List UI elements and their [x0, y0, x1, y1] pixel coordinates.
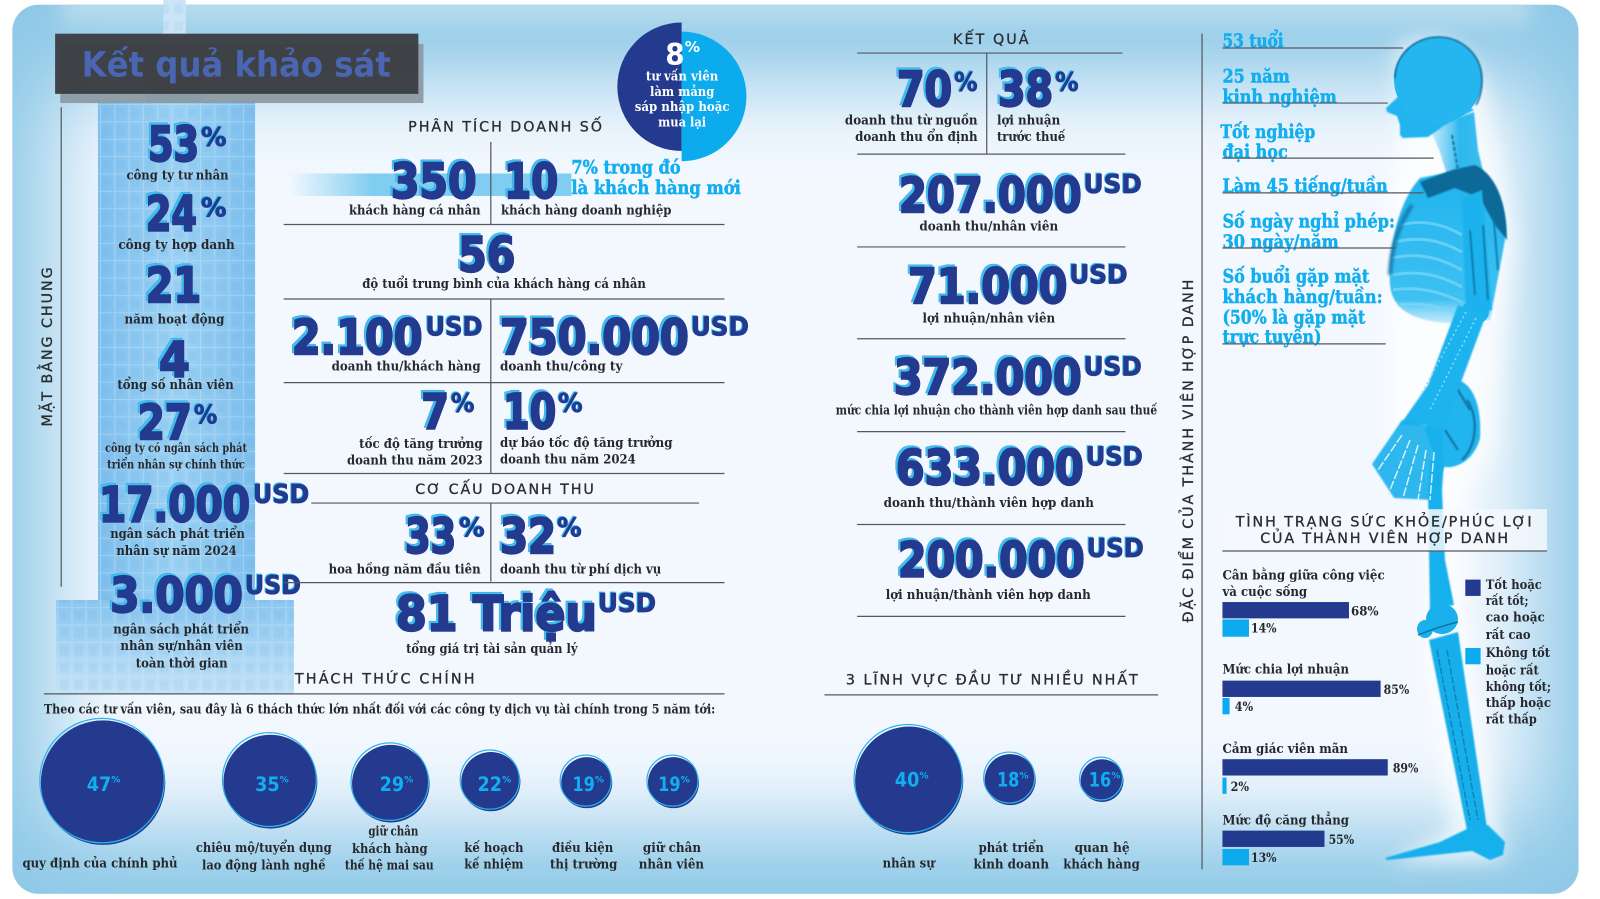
bubble: 19% market conditions: % — [595, 775, 604, 786]
heading: sales analysis: PHÂN TÍCH DOANH SỐ — [408, 117, 602, 136]
stat: 3,000 USD HR budget per employee: toàn thời gian — [136, 656, 228, 671]
panel: revenue structure — [284, 479, 724, 657]
bubble: 19% employee retention: giữ chân — [643, 841, 701, 856]
bubble: 40% human resources: 40 — [895, 769, 919, 792]
callout: client meetings per week: (50% là gặp mặt — [1222, 307, 1366, 328]
stat: 81 million USD AUM — [396, 587, 656, 657]
stat: 350 individual clients — [349, 154, 481, 218]
callout: 25 years experience: 25 năm — [1222, 67, 1290, 88]
bar group: stress level — [1222, 812, 1354, 866]
dividers — [857, 53, 1126, 616]
bubble: 47% government regulation — [22, 718, 178, 871]
stat: 81 million USD AUM: 81 Triệu — [396, 587, 597, 643]
callout: 8% M&A pie: sáp nhập hoặc — [635, 100, 730, 115]
callout: 25 years experience — [1222, 67, 1388, 108]
stat: 21 years of operation: năm hoạt động — [124, 312, 224, 327]
panel: results — [836, 29, 1158, 616]
stat: 24% partnerships: công ty hợp danh — [118, 238, 235, 253]
callout: 8% M&A pie: mua lại — [658, 116, 706, 131]
stat: 2,100 USD revenue per client: 2.100 — [292, 310, 422, 366]
stat: 17,000 USD HR budget 2024: USD — [253, 480, 309, 510]
bubble: 19% market conditions: điều kiện — [552, 840, 614, 856]
stat: 7% growth 2023: 7 — [421, 385, 449, 441]
stat: 750,000 USD revenue per company: USD — [691, 313, 749, 343]
stat: 3,000 USD HR budget per employee — [110, 568, 301, 671]
bubble: 47% government regulation: 47 — [87, 773, 111, 796]
stat: 71,000 USD profit per employee: 71.000 — [908, 259, 1067, 315]
stat: 33% first-year commission: % — [459, 514, 485, 544]
bubble: 40% human resources — [854, 724, 963, 871]
bar group: stress level: 13% — [1251, 851, 1277, 866]
stat: 27% formal HR budget: % — [194, 400, 217, 430]
stat: 4 employees: 4 — [159, 333, 190, 389]
stat: 38% pre-tax profit — [997, 62, 1079, 145]
stat: 750,000 USD revenue per company: doanh thu/công ty — [500, 359, 624, 374]
stat: 33% first-year commission: hoa hồng năm đầu tiên — [329, 561, 481, 577]
bar group: profit share: 85% — [1384, 683, 1410, 698]
stat: 10% projected growth 2024: doanh thu năm 2024 — [500, 452, 636, 467]
bar group: work-life balance: Cân bằng giữa công việc — [1222, 568, 1385, 584]
bubble: 29% next generation clients: 29 — [380, 773, 404, 796]
stat: 7% growth 2023: doanh thu năm 2023 — [347, 453, 483, 468]
stat: 71,000 USD profit per employee: lợi nhuận/nhân viên — [922, 311, 1055, 326]
bar group: profit share: 4% — [1235, 700, 1253, 715]
bubble: 16% client relations: % — [1111, 771, 1120, 782]
stat: 27% formal HR budget: công ty có ngân sách phát — [105, 441, 247, 455]
callout: 30 days leave per year — [1222, 211, 1396, 253]
stat: 33% first-year commission: 33 — [405, 509, 456, 565]
bubble: 35% skilled labour recruiting: 35 — [255, 773, 280, 796]
heading: top 3 investment areas: 3 LĨNH VỰC ĐẦU TƯ NHIỀU NHẤT — [846, 670, 1138, 689]
bubble: 35% skilled labour recruiting: chiêu mộ/tuyển dụng — [196, 840, 332, 856]
legend: poor or low: thấp hoặc — [1486, 695, 1551, 711]
bar group: work-life balance — [1222, 568, 1385, 637]
bubble: 40% human resources: nhân sự — [883, 856, 936, 871]
panel: partner characteristics callouts — [1220, 28, 1434, 348]
stat: 17,000 USD HR budget 2024 — [99, 477, 309, 559]
bubble: 29% next generation clients: khách hàng — [352, 842, 428, 857]
callout: 8% M&A pie — [617, 22, 746, 161]
bar group: work-life balance: 14% — [1251, 622, 1277, 637]
callout: 8% M&A pie: 8 — [665, 37, 685, 71]
bubble: 19% market conditions — [550, 755, 617, 872]
stat: 3,000 USD HR budget per employee: USD — [245, 571, 301, 601]
callout: university graduate: Tốt nghiệp — [1220, 121, 1315, 143]
stat: 10% projected growth 2024: dự báo tốc độ tăng trưởng — [500, 435, 672, 451]
callout: client meetings per week: khách hàng/tuần: — [1222, 286, 1383, 308]
bar group: profit share: Mức chia lợi nhuận — [1222, 662, 1349, 677]
callout: client meetings per week — [1222, 264, 1386, 348]
stat: 207,000 USD revenue per employee: USD — [1084, 170, 1142, 200]
stat: 56 average client age: độ tuổi trung bình của khách hàng cá nhân — [362, 276, 646, 292]
stat: 633,000 USD revenue per partner: 633.000 — [896, 441, 1084, 497]
callout: 53 years old: 53 tuổi — [1222, 28, 1284, 52]
stat: 27% formal HR budget: 27 — [138, 395, 192, 451]
stat: 27% formal HR budget: triển nhân sự chính thức — [107, 457, 245, 471]
heading: revenue structure: CƠ CẤU DOANH THU — [415, 479, 594, 498]
bubble: 18% business development: phát triển — [979, 840, 1044, 856]
stat: 21 years of operation — [124, 258, 224, 327]
stat: 372,000 USD partner profit share: mức chia lợi nhuận cho thành viên hợp danh sau thuế — [836, 402, 1158, 418]
bar group: satisfaction: 89% — [1393, 761, 1419, 776]
bubble: 16% client relations — [1063, 757, 1140, 872]
bubble: 16% client relations: quan hệ — [1074, 841, 1130, 856]
stat: 17,000 USD HR budget 2024: 17.000 — [99, 477, 250, 533]
bubble: 19% employee retention: % — [681, 775, 690, 786]
bubble: 47% government regulation: % — [111, 775, 120, 786]
callout: client meetings per week: Số buổi gặp mặt — [1222, 264, 1370, 288]
callout: university graduate — [1220, 121, 1434, 163]
callout: 7% new clients: là khách hàng mới — [571, 178, 741, 199]
stat: 70% recurring revenue: doanh thu từ nguồn — [845, 112, 978, 128]
stat: 17,000 USD HR budget 2024: nhân sự năm 2024 — [116, 544, 237, 559]
vertical heading: partner characteristics: ĐẶC ĐIỂM CỦA THÀNH VIÊN HỢP DANH — [1178, 280, 1197, 622]
bar group: stress level: 55% — [1329, 833, 1354, 848]
legend: poor or low — [1465, 645, 1551, 727]
heading: health and wellbeing: TÌNH TRẠNG SỨC KHỎE/PHÚC LỢI — [1235, 512, 1532, 531]
bar group: satisfaction: Cảm giác viên mãn — [1222, 741, 1348, 757]
legend: poor or low: không tốt; — [1486, 679, 1551, 695]
legend: poor or low: Không tốt — [1486, 645, 1551, 661]
stat: 10 business clients: khách hàng doanh nghiệp — [501, 203, 671, 218]
stat: 32% service fee revenue: 32 — [500, 509, 556, 565]
bubble: 22% succession planning: 22 — [478, 773, 502, 796]
panel: top 3 investment areas — [824, 670, 1158, 872]
title banner — [55, 34, 423, 103]
bar group: stress level: Mức độ căng thẳng — [1222, 812, 1349, 829]
stat: 53% private companies — [127, 117, 229, 184]
stat: 2,100 USD revenue per client — [292, 310, 483, 374]
bubble: 35% skilled labour recruiting — [196, 733, 332, 873]
stat: 70% recurring revenue — [845, 62, 978, 145]
legend: good or high: rất tốt; — [1486, 593, 1529, 609]
callout: 8% M&A pie: % — [685, 38, 700, 56]
stat: 70% recurring revenue: % — [954, 68, 978, 98]
callout: university graduate: đại học — [1222, 142, 1288, 163]
bubble: 29% next generation clients: % — [404, 775, 413, 786]
stat: 2,100 USD revenue per client: USD — [426, 313, 483, 343]
stat: 38% pre-tax profit: trước thuế — [997, 129, 1066, 145]
stat: 3,000 USD HR budget per employee: ngân sách phát triển — [113, 622, 249, 638]
stat: 4 employees — [117, 333, 234, 393]
stat: 750,000 USD revenue per company: 750.000 — [500, 310, 689, 366]
stat: 24% partnerships — [118, 187, 235, 253]
vertical heading: general overview: MẶT BẰNG CHUNG — [37, 267, 56, 427]
stat: 7% growth 2023: % — [451, 389, 474, 419]
bubble: 22% succession planning — [460, 750, 524, 872]
panel: main challenges — [22, 670, 724, 873]
bubble: 19% employee retention — [639, 755, 704, 872]
stat: 81 million USD AUM: tổng giá trị tài sản quản lý — [406, 641, 579, 657]
stat: 53% private companies: % — [201, 123, 227, 153]
bubble: 35% skilled labour recruiting: % — [280, 775, 289, 786]
stat: 70% recurring revenue: 70 — [897, 62, 952, 118]
stat: 10 business clients — [501, 154, 671, 218]
stat: 3,000 USD HR budget per employee: 3.000 — [110, 568, 243, 624]
stat: 38% pre-tax profit: 38 — [998, 62, 1053, 118]
heading: health and wellbeing — [1222, 509, 1547, 551]
stat: 350 individual clients: 350 — [391, 154, 477, 210]
stat: 3,000 USD HR budget per employee: nhân sự/nhân viên — [120, 639, 243, 654]
callout: 7% new clients: 7% trong đó — [571, 157, 681, 178]
callout: 25 years experience: kinh nghiệm — [1222, 87, 1337, 108]
callout: 45 hours per week: Làm 45 tiếng/tuần — [1222, 175, 1388, 197]
title banner: Kết quả khảo sát — [82, 46, 391, 86]
stat: 372,000 USD partner profit share: USD — [1084, 353, 1142, 383]
stat: 27% formal HR budget — [105, 395, 247, 471]
stat: 32% service fee revenue — [500, 509, 662, 577]
dividers — [284, 503, 724, 583]
callout: 8% M&A pie: làm mảng — [650, 84, 714, 100]
stat: 21 years of operation: 21 — [146, 258, 201, 314]
stat: 24% partnerships: 24 — [146, 187, 197, 243]
stat: 200,000 USD profit per partner — [886, 533, 1144, 603]
stat: 207,000 USD revenue per employee: doanh thu/nhân viên — [919, 220, 1058, 235]
heading: main challenges: THÁCH THỨC CHÍNH — [294, 670, 474, 688]
stat: 17,000 USD HR budget 2024: ngân sách phát triển — [110, 526, 245, 542]
legend: good or high: rất cao — [1486, 627, 1531, 643]
heading: health and wellbeing: CỦA THÀNH VIÊN HỢP DANH — [1260, 528, 1508, 547]
highlight band — [289, 173, 571, 196]
stat: 372,000 USD partner profit share: 372.000 — [894, 350, 1082, 406]
bubble: 19% employee retention: nhân viên — [639, 857, 704, 872]
bubble: 19% market conditions: thị trường — [550, 857, 617, 872]
callout: 30 days leave per year: 30 ngày/năm — [1222, 232, 1339, 253]
stat: 350 individual clients: khách hàng cá nhân — [349, 203, 481, 218]
stat: 38% pre-tax profit: lợi nhuận — [997, 114, 1061, 129]
dividers — [284, 142, 724, 473]
stat: 53% private companies: 53 — [148, 117, 199, 173]
stat: 10% projected growth 2024: % — [558, 389, 583, 419]
stat: 38% pre-tax profit: % — [1055, 68, 1079, 98]
stat: 200,000 USD profit per partner: USD — [1087, 534, 1144, 564]
bubble: 18% business development: % — [1019, 771, 1029, 782]
bubble: 29% next generation clients: thế hệ mai sau — [345, 857, 434, 873]
bubble: 22% succession planning: kế nhiệm — [464, 856, 523, 872]
stat: 71,000 USD profit per employee: USD — [1069, 261, 1128, 291]
bubble: 40% human resources: % — [919, 771, 929, 782]
panel: sales analysis — [284, 117, 749, 473]
bubble: 19% employee retention: 19 — [658, 773, 681, 796]
bubble: 18% business development: kinh doanh — [973, 857, 1049, 872]
stat: 32% service fee revenue: % — [557, 514, 582, 544]
stat: 200,000 USD profit per partner: lợi nhuận/thành viên hợp danh — [886, 588, 1091, 603]
bubble: 22% succession planning: kế hoạch — [464, 840, 524, 856]
bar group: satisfaction: 2% — [1231, 780, 1249, 795]
stat: 56 average client age: 56 — [458, 227, 515, 283]
bar group: work-life balance: 68% — [1351, 604, 1379, 619]
callout: client meetings per week: trực tuyến) — [1222, 326, 1321, 348]
stat: 207,000 USD revenue per employee: 207.000 — [899, 168, 1082, 224]
stat: 633,000 USD revenue per partner: doanh thu/thành viên hợp danh — [884, 496, 1094, 511]
bubble: 18% business development — [973, 752, 1049, 872]
stat: 633,000 USD revenue per partner: USD — [1086, 442, 1143, 472]
legend: poor or low: rất thấp — [1486, 711, 1537, 727]
stat: 633,000 USD revenue per partner — [884, 441, 1143, 511]
legend: good or high — [1465, 577, 1545, 643]
stat: 10 business clients: 10 — [504, 154, 558, 210]
stat: 7% growth 2023: tốc độ tăng trưởng — [359, 436, 483, 452]
legend: good or high: cao hoặc — [1486, 610, 1545, 625]
intro sentence: Theo các tư vấn viên, sau đây là 6 thách thức lớn nhất đối với các công ty dịch vụ tài chính trong 5 năm tới: — [44, 701, 715, 717]
bar group: profit share — [1222, 662, 1410, 715]
stat: 10% projected growth 2024: 10 — [503, 385, 556, 441]
callout: 8% M&A pie: tư vấn viên — [646, 69, 719, 85]
stat: 70% recurring revenue: doanh thu ổn định — [855, 129, 978, 145]
stat: 33% first-year commission — [329, 509, 485, 577]
stat: 4 employees: tổng số nhân viên — [117, 377, 234, 393]
bubble: 35% skilled labour recruiting: lao động lành nghề — [202, 857, 326, 873]
bubble: 29% next generation clients — [345, 743, 434, 873]
stat: 372,000 USD partner profit share — [836, 350, 1158, 418]
stat: 7% growth 2023 — [347, 385, 483, 468]
callout: 7% new clients — [571, 157, 741, 199]
bar group: satisfaction — [1222, 741, 1419, 795]
bubble: 18% business development: 18 — [997, 769, 1019, 792]
stat: 53% private companies: công ty tư nhân — [127, 169, 229, 184]
stat: 200,000 USD profit per partner: 200.000 — [898, 533, 1085, 589]
heading: results: KẾT QUẢ — [953, 29, 1029, 48]
stat: 81 million USD AUM: USD — [598, 589, 656, 619]
bubble: 19% market conditions: 19 — [572, 773, 595, 796]
bubble: 22% succession planning: % — [502, 775, 511, 786]
panel: general stats on tower — [99, 117, 309, 671]
bubble: 16% client relations: khách hàng — [1063, 857, 1140, 872]
stat: 2,100 USD revenue per client: doanh thu/khách hàng — [332, 359, 481, 374]
legend: good or high: Tốt hoặc — [1486, 577, 1542, 593]
stat: 10% projected growth 2024 — [500, 385, 672, 467]
bubble: 47% government regulation: quy định của chính phủ — [22, 855, 178, 871]
callout: 30 days leave per year: Số ngày nghỉ phép: — [1222, 211, 1395, 233]
bar group: work-life balance: và cuộc sống — [1222, 584, 1307, 600]
stat: 24% partnerships: % — [201, 193, 227, 223]
legend: poor or low: hoặc rất — [1486, 663, 1540, 679]
stat: 56 average client age — [362, 227, 646, 292]
illustration: skeleton body — [1372, 37, 1515, 862]
bubble: 29% next generation clients: giữ chân — [368, 825, 419, 840]
illustration: tower — [56, 0, 294, 694]
bubble: 16% client relations: 16 — [1089, 769, 1111, 792]
stat: 32% service fee revenue: doanh thu từ phí dịch vụ — [500, 562, 662, 577]
panel: health and wellbeing — [1222, 509, 1551, 866]
